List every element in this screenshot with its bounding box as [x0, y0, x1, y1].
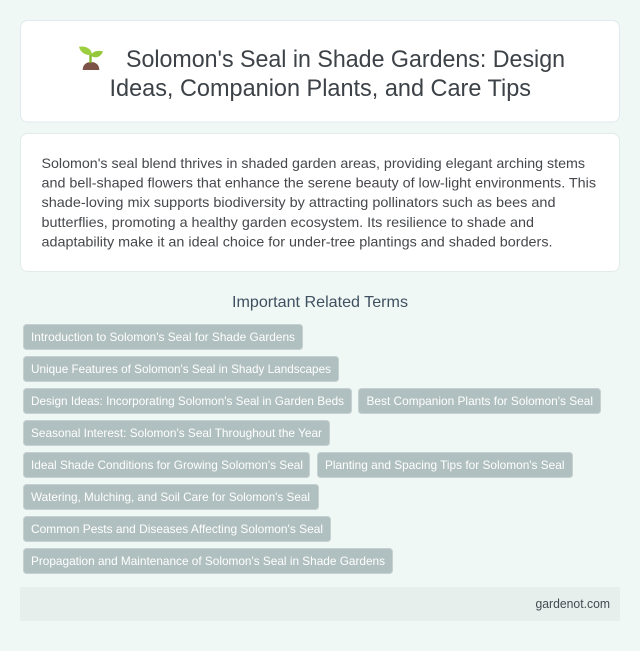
tag: watering and soil: Watering, Mulching, and Soil Care for Solomon's Seal: [31, 490, 310, 504]
description text: butterflies, promoting a healthy garden ecosystem. Its resilience to shade and: [42, 214, 534, 230]
tag: planting and spacing: [318, 452, 572, 478]
tag: propagation: [24, 548, 392, 574]
description text: shade-loving mix supports biodiversity by attracting pollinators such as bees and: [42, 194, 556, 210]
tag: shade conditions: Ideal Shade Conditions for Growing Solomon's Seal: [31, 458, 303, 472]
description text: adaptability make it an ideal choice for under-tree plantings and shaded borders.: [42, 233, 552, 249]
footer source text: gardenot.com: [536, 597, 610, 611]
tag: seasonal interest: Seasonal Interest: Solomon's Seal Throughout the Year: [31, 426, 322, 440]
panel: title card: [20, 20, 620, 122]
tag: unique features: Unique Features of Solomon's Seal in Shady Landscapes: [31, 362, 331, 376]
title heading: Solomon's Seal in Shade Gardens: Design: [126, 46, 565, 73]
description text: Solomon's seal blend thrives in shaded garden areas, providing elegant arching stems: [42, 155, 585, 171]
tag: introduction: Introduction to Solomon's Seal for Shade Gardens: [31, 330, 295, 344]
tag: companion plants: Best Companion Plants for Solomon's Seal: [366, 394, 593, 408]
tag: unique features: [24, 356, 338, 382]
panel: description: [20, 134, 620, 272]
tag: introduction: [24, 324, 302, 350]
tag: propagation: Propagation and Maintenance of Solomon's Seal in Shade Gardens: [31, 554, 385, 568]
description text: and bell-shaped flowers that enhance the serene beauty of low-light environments. This: [42, 175, 596, 191]
tag: design ideas: Design Ideas: Incorporating Solomon's Seal in Garden Beds: [31, 394, 344, 408]
tag: planting and spacing: Planting and Spacing Tips for Solomon's Seal: [325, 458, 564, 472]
tag: pests and diseases: [24, 516, 330, 542]
panel: related term tags: [24, 324, 600, 574]
footer bar: [20, 587, 620, 621]
tag: pests and diseases: Common Pests and Diseases Affecting Solomon's Seal: [31, 522, 323, 536]
title heading: [110, 46, 565, 102]
description text: [42, 155, 596, 249]
tag: seasonal interest: [24, 420, 330, 446]
icon: seedling: [79, 46, 103, 70]
tag: design ideas: [24, 388, 352, 414]
tag: shade conditions: [24, 452, 310, 478]
heading: important related terms: Important Related Terms: [232, 294, 408, 311]
tag: watering and soil: [24, 484, 318, 510]
tag: companion plants: [358, 388, 600, 414]
title heading: Ideas, Companion Plants, and Care Tips: [110, 75, 531, 102]
